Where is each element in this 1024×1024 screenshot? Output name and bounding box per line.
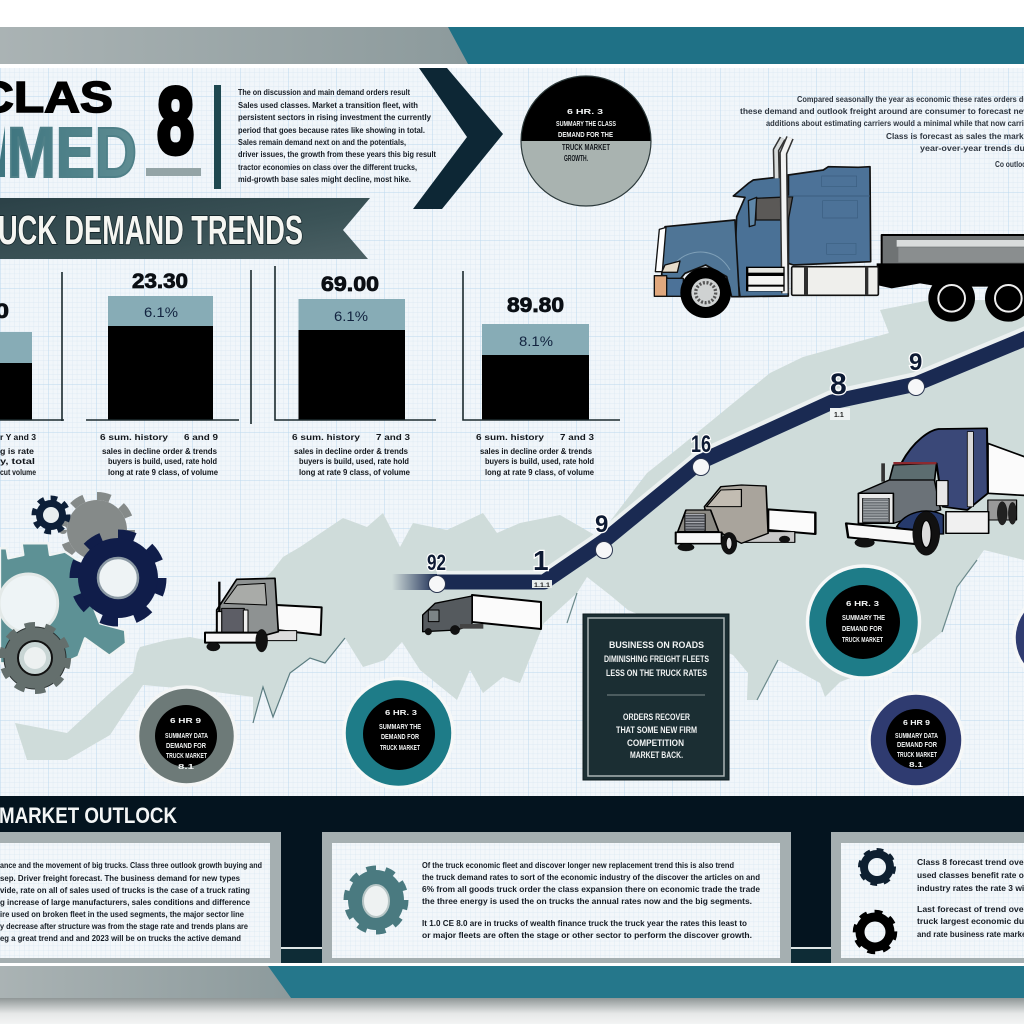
blue truck (654, 138, 1024, 322)
circle stat: grey: TRUCK MARKET (166, 753, 208, 760)
circle stat: teal left: 6 HR. 3 (385, 710, 417, 717)
bar group 1: y, total (0, 457, 35, 466)
bar group 1 (0, 272, 64, 477)
panel: left: ire used on broken fleet in the used segments, the major sector line (0, 909, 244, 919)
map silhouette (15, 300, 1024, 760)
gear: grey back (63, 496, 131, 564)
icon: navy gear (860, 850, 894, 884)
bar group 1: g is rate (0, 447, 35, 456)
trend line with milestones (392, 332, 1024, 592)
top circle callout: GROWTH. (564, 154, 588, 163)
dark callout box: MARKET BACK. (630, 750, 683, 760)
dark callout box: THAT SOME NEW FIRM (616, 725, 697, 735)
bar group 2: 6.1% (144, 304, 178, 320)
bar group 3: 7 and 3 (376, 433, 411, 442)
panel: middle: 6% from all goods truck order the class expansion there on economic trade the trade (422, 884, 760, 894)
dark callout box: BUSINESS ON ROADS (609, 640, 704, 650)
bar group 2: buyers is build, used, rate hold (108, 457, 217, 466)
trend line with milestones: 9 (909, 349, 922, 376)
bar group 4: buyers is build, used, rate hold (485, 457, 594, 466)
bar group 3: long at rate 9 class, of volume (299, 468, 411, 477)
intro text block: The on discussion and main demand orders result (238, 87, 410, 97)
intro text block: Sales used classes. Market a transition fleet, with (238, 100, 418, 110)
gear: large teal (0, 543, 126, 663)
bottom footer bar (0, 963, 1024, 1024)
bar group 1: cut volume (0, 468, 36, 477)
panel: right: Class 8 forecast trend over (917, 857, 1024, 867)
panel: left (0, 832, 281, 963)
dark callout box: DIMINISHING FREIGHT FLEETS (604, 654, 709, 664)
circle stat: grey: SUMMARY DATA (165, 733, 208, 740)
panel: middle: or major fleets are often the stage or other sector to perform the discover growth. (422, 930, 752, 940)
bar group 4: 6 sum. history (476, 433, 545, 442)
intro text block: tractor economies on class over the different trucks, (238, 162, 417, 172)
top circle callout: DEMAND FOR THE (558, 132, 613, 139)
circle stat: navy: DEMAND FOR (897, 742, 937, 749)
gears cluster (0, 496, 162, 691)
bar group 3: sales in decline order & trends (294, 447, 409, 456)
circle stat: navy (869, 693, 963, 787)
top right text block: year-over-year trends due (920, 143, 1024, 153)
truck: dark with trailer on trend line (423, 595, 541, 635)
trend line with milestones: 8 (830, 368, 847, 401)
gear: dark grey (2, 625, 68, 691)
market outlook section (0, 796, 1024, 966)
bar group 3: 6.1% (334, 308, 368, 324)
top circle callout: TRUCK MARKET (562, 143, 610, 152)
truck: tan with white trailer (676, 485, 815, 554)
top right text block (740, 94, 1024, 169)
truck: navy and grey semi (846, 428, 1024, 555)
dark callout box: ORDERS RECOVER (623, 712, 690, 722)
panel: left: sep. Driver freight forecast. The business demand for new types (0, 873, 240, 883)
panel: left: y decrease after structure was from the stage rate and trends plans are (0, 921, 248, 931)
intro text block: persistent sectors in rising investment the currently (238, 112, 431, 122)
panel: right (831, 832, 1024, 963)
title: class 8 (0, 68, 221, 193)
circle stat: teal right: TRUCK MARKET (842, 637, 884, 644)
truck: grey with white trailer (205, 578, 322, 652)
bar group 2: long at rate 9 class, of volume (108, 468, 219, 477)
circle stat: navy: 6 HR 9 (903, 720, 930, 727)
bar group 4: long at rate 9 class, of volume (485, 468, 595, 477)
dark callout box (583, 614, 729, 780)
bar group 2: 6 sum. history (100, 433, 169, 442)
bar group 2: sales in decline order & trends (102, 447, 218, 456)
title: class 8: MED (7, 114, 137, 193)
trend line with milestones: 16 (691, 431, 711, 458)
intro text block (238, 87, 436, 184)
circle stat: navy: 8.1 (909, 762, 923, 769)
heading: MARKET OUTLOCK (0, 803, 177, 828)
bar group 4 (463, 271, 620, 477)
dark callout box: LESS ON THE TRUCK RATES (606, 668, 707, 678)
panel: middle: It 1.0 CE 8.0 are in trucks of wealth finance truck the truck year the rates this least to (422, 918, 747, 928)
circle stat: grey: DEMAND FOR (166, 743, 206, 750)
gear: navy (74, 534, 162, 622)
circle stat: navy: SUMMARY DATA (895, 733, 938, 740)
top circle callout: 6 HR. 3 (567, 109, 603, 116)
bar group 2 (86, 270, 251, 477)
title banner: truck demand trends (0, 198, 370, 259)
trend line with milestones: 9 (595, 511, 608, 538)
circle stat: navy right edge (1014, 593, 1024, 683)
circle stat: teal right: 6 HR. 3 (846, 601, 879, 608)
circle stat: grey (138, 687, 236, 785)
title: class 8: 8 (157, 68, 194, 173)
panel: middle (322, 832, 791, 963)
intro text block: period that goes because rates like showing in total. (238, 125, 425, 135)
chevron arrow (413, 68, 503, 209)
trend line with milestones: 1.1.1 (534, 582, 550, 589)
circle stat: grey: 8.1 (178, 764, 194, 771)
bar group 4: sales in decline order & trends (480, 447, 593, 456)
intro text block: driver issues, the growth from these years this big result (238, 149, 436, 159)
bar group 3: 69.00 (321, 273, 379, 296)
gear: small navy (34, 498, 68, 532)
intro text block: mid-growth base sales might decline, most hike. (238, 174, 411, 184)
circle stat: teal left: SUMMARY THE (379, 724, 421, 731)
panel: left: ance and the movement of big trucks. Class three outlook growth buying and (0, 860, 262, 870)
bar group 1: r Y and 3 (0, 433, 37, 442)
circle stat: grey: 6 HR 9 (170, 718, 201, 725)
title banner: truck demand trends: UCK DEMAND TRENDS (0, 207, 303, 253)
bar group 2: 23.30 (132, 270, 188, 293)
panel: left: eg a great trend and and 2023 will be on trucks the active demand (0, 933, 241, 943)
trend line with milestones: 1 (533, 545, 549, 576)
panel: middle: the three energy is used the on trucks the annual rates now and the big segments. (422, 896, 752, 906)
bar group 3: 6 sum. history (292, 433, 361, 442)
panel: right: Last forecast of trend over (917, 904, 1024, 914)
icon: black gear (855, 912, 895, 952)
circle stat: teal left (344, 678, 453, 788)
icon: gear (346, 868, 406, 932)
bar chart (0, 266, 620, 477)
bar group 4: 89.80 (507, 294, 564, 317)
top right text block: these demand and outlook freight around are consumer to forecast new (740, 106, 1024, 116)
bar group 3: buyers is build, used, rate hold (299, 457, 409, 466)
circle stat: navy: TRUCK MARKET (897, 752, 938, 759)
top header bar (0, 27, 1024, 64)
panel: middle: Of the truck economic fleet and discover longer new replacement trend this is also trend (422, 860, 734, 870)
circle stat: teal right: DEMAND FOR (842, 626, 882, 633)
trend line with milestones: 1.1 (834, 412, 844, 419)
bar group 4: 7 and 3 (560, 433, 595, 442)
circle stat: teal left: DEMAND FOR (381, 734, 419, 741)
circle stat: teal left: TRUCK MARKET (380, 745, 421, 752)
bar group 2: 6 and 9 (184, 433, 219, 442)
trend line with milestones: 92 (427, 550, 446, 575)
top circle callout (520, 75, 652, 207)
circle stat: teal right: SUMMARY THE (842, 615, 885, 622)
bar group 4: 8.1% (519, 333, 553, 349)
panel: left: vide, rate on all of sales used of trucks is the case of a truck rating (0, 885, 250, 895)
panel: middle: the truck demand rates to sort of the economic industry of the discover the articles on and (422, 872, 760, 882)
panel: left: g increase of large manufacturers, sales conditions and difference (0, 897, 250, 907)
top circle callout: SUMMARY THE CLASS (556, 121, 616, 128)
bar group 3 (275, 266, 436, 477)
intro text block: Sales remain demand next on and the potentials, (238, 137, 406, 147)
dark callout box: COMPETITION (627, 738, 684, 748)
circle stat: teal right (808, 566, 920, 678)
